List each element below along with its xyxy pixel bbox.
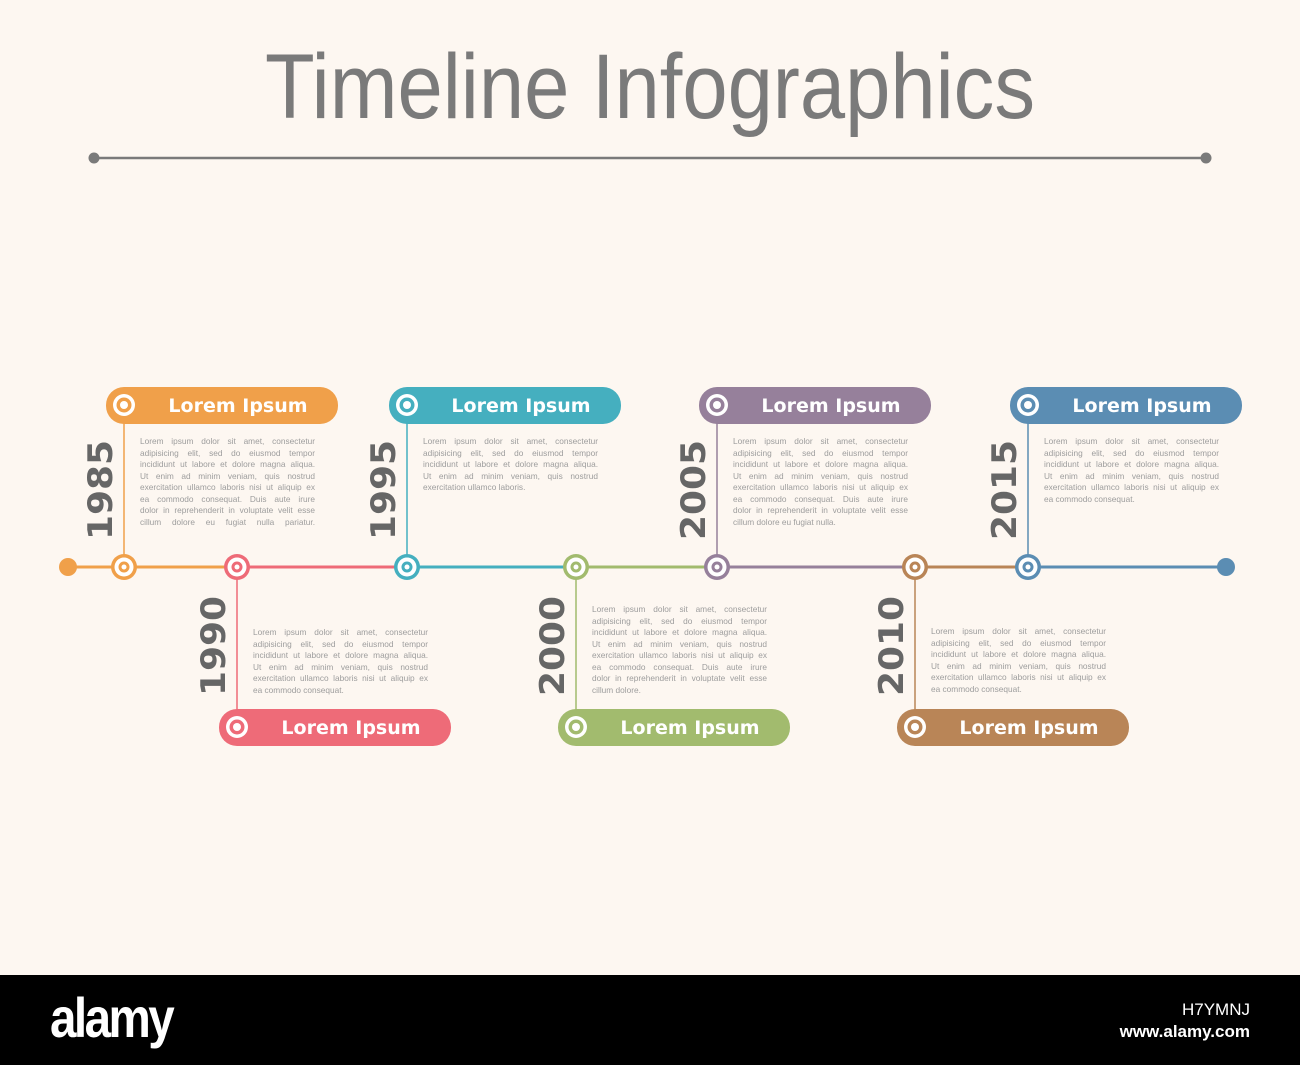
text: 2000: cillum dolore.: [592, 685, 641, 695]
milestone 2005: 2005: [674, 440, 714, 540]
text: 1990: adipisicing elit, sed do eiusmod tempor: [253, 639, 428, 649]
text: 2010: ea commodo consequat.: [931, 684, 1022, 694]
text: 2000: ea commodo consequat. Duis aute irure: [592, 662, 767, 672]
text: 2015: adipisicing elit, sed do eiusmod tempor: [1044, 448, 1219, 458]
text: 2005: Lorem ipsum dolor sit amet, consectetur: [733, 436, 908, 446]
milestone 1985: Lorem Ipsum: [168, 395, 308, 417]
text: 2005: incididunt ut labore et dolore magna aliqua.: [733, 459, 908, 469]
text: 2005: ea commodo consequat. Duis aute irure: [733, 494, 908, 504]
text: 2000: incididunt ut labore et dolore magna aliqua.: [592, 627, 767, 637]
milestone 1990: 1990: [194, 596, 234, 696]
text: 1990: [253, 627, 428, 695]
text: 2015: [1044, 436, 1219, 504]
text: 2010: exercitation ullamco laboris nisi ut aliquip ex: [931, 672, 1106, 682]
text: 1990: incididunt ut labore et dolore magna aliqua.: [253, 650, 428, 660]
milestone 2000: 2000: [533, 596, 573, 696]
text: 1995: Ut enim ad minim veniam, quis nostrud: [423, 471, 598, 481]
text: 1985: [140, 436, 315, 527]
text: 2000: [592, 604, 767, 695]
text: 2005: cillum dolore eu fugiat nulla.: [733, 517, 836, 527]
milestone 2015: 2015: [985, 440, 1025, 540]
title underline: [88, 152, 1212, 164]
text: 2005: [733, 436, 908, 527]
text: 1995: adipisicing elit, sed do eiusmod tempor: [423, 448, 598, 458]
footer id: [1120, 1000, 1250, 1041]
text: 2015: Ut enim ad minim veniam, quis nostrud: [1044, 471, 1219, 481]
text: 2010: [931, 626, 1106, 694]
text: 1990: ea commodo consequat.: [253, 685, 344, 695]
milestone 1995: Lorem Ipsum: [451, 395, 591, 417]
text: 2005: adipisicing elit, sed do eiusmod tempor: [733, 448, 908, 458]
text: 2010: Lorem ipsum dolor sit amet, consectetur: [931, 626, 1106, 636]
text: 1985: incididunt ut labore et dolore magna aliqua.: [140, 459, 315, 469]
text: 2000: adipisicing elit, sed do eiusmod tempor: [592, 616, 767, 626]
milestone 1985: [81, 387, 338, 580]
text: 1985: dolor in reprehenderit in voluptate velit esse: [140, 505, 315, 515]
timeline axis: [59, 558, 1235, 576]
text: 1995: exercitation ullamco laboris.: [423, 482, 525, 492]
text: 2005: exercitation ullamco laboris nisi ut aliquip ex: [733, 482, 908, 492]
text: 1985: exercitation ullamco laboris nisi ut aliquip ex: [140, 482, 315, 492]
text: 1985: Lorem ipsum dolor sit amet, consectetur: [140, 436, 315, 446]
text: 1990: exercitation ullamco laboris nisi ut aliquip ex: [253, 673, 428, 683]
footer id: www.alamy.com: [1120, 1022, 1250, 1041]
milestone 2015: [985, 387, 1242, 580]
text: 2005: Ut enim ad minim veniam, quis nostrud: [733, 471, 908, 481]
text: 2000: Lorem ipsum dolor sit amet, consectetur: [592, 604, 767, 614]
text: 2010: adipisicing elit, sed do eiusmod tempor: [931, 638, 1106, 648]
text: 1985: cillum dolore eu fugiat nulla pariatur.: [140, 517, 315, 527]
milestone 2005: [674, 387, 931, 580]
text: 1990: Lorem ipsum dolor sit amet, consectetur: [253, 627, 428, 637]
milestone 2015: Lorem Ipsum: [1072, 395, 1212, 417]
footer id: H7YMNJ: [1182, 1000, 1250, 1019]
milestone 1995: 1995: [364, 440, 404, 540]
text: 1995: incididunt ut labore et dolore magna aliqua.: [423, 459, 598, 469]
text: 2015: Lorem ipsum dolor sit amet, consectetur: [1044, 436, 1219, 446]
text: 1995: [423, 436, 598, 492]
text: 2000: dolor in reprehenderit in voluptate velit esse: [592, 673, 767, 683]
footer logo: alamy: [50, 986, 172, 1049]
milestone 2000: [533, 554, 790, 746]
text: 1985: ea commodo consequat. Duis aute irure: [140, 494, 315, 504]
milestone 1995: [364, 387, 621, 580]
title: Timeline Infographics: [265, 36, 1035, 138]
text: 2005: dolor in reprehenderit in voluptate velit esse: [733, 505, 908, 515]
text: 2015: ea commodo consequat.: [1044, 494, 1135, 504]
text: 2015: incididunt ut labore et dolore magna aliqua.: [1044, 459, 1219, 469]
milestone 2005: Lorem Ipsum: [761, 395, 901, 417]
milestone 2010: [872, 554, 1129, 746]
milestone 1990: Lorem Ipsum: [281, 717, 421, 739]
text: 1990: Ut enim ad minim veniam, quis nostrud: [253, 662, 428, 672]
text: 1985: Ut enim ad minim veniam, quis nostrud: [140, 471, 315, 481]
footer band: [0, 975, 1300, 1065]
text: 2000: exercitation ullamco laboris nisi ut aliquip ex: [592, 650, 767, 660]
milestone 1985: 1985: [81, 440, 121, 540]
milestone 2010: Lorem Ipsum: [959, 717, 1099, 739]
text: 2000: Ut enim ad minim veniam, quis nostrud: [592, 639, 767, 649]
milestone 2000: Lorem Ipsum: [620, 717, 760, 739]
text: 2015: exercitation ullamco laboris nisi ut aliquip ex: [1044, 482, 1219, 492]
text: 1985: adipisicing elit, sed do eiusmod tempor: [140, 448, 315, 458]
milestone 1990: [194, 554, 451, 746]
text: 2010: Ut enim ad minim veniam, quis nostrud: [931, 661, 1106, 671]
text: 2010: incididunt ut labore et dolore magna aliqua.: [931, 649, 1106, 659]
milestone 2010: 2010: [872, 596, 912, 696]
text: 1995: Lorem ipsum dolor sit amet, consectetur: [423, 436, 598, 446]
